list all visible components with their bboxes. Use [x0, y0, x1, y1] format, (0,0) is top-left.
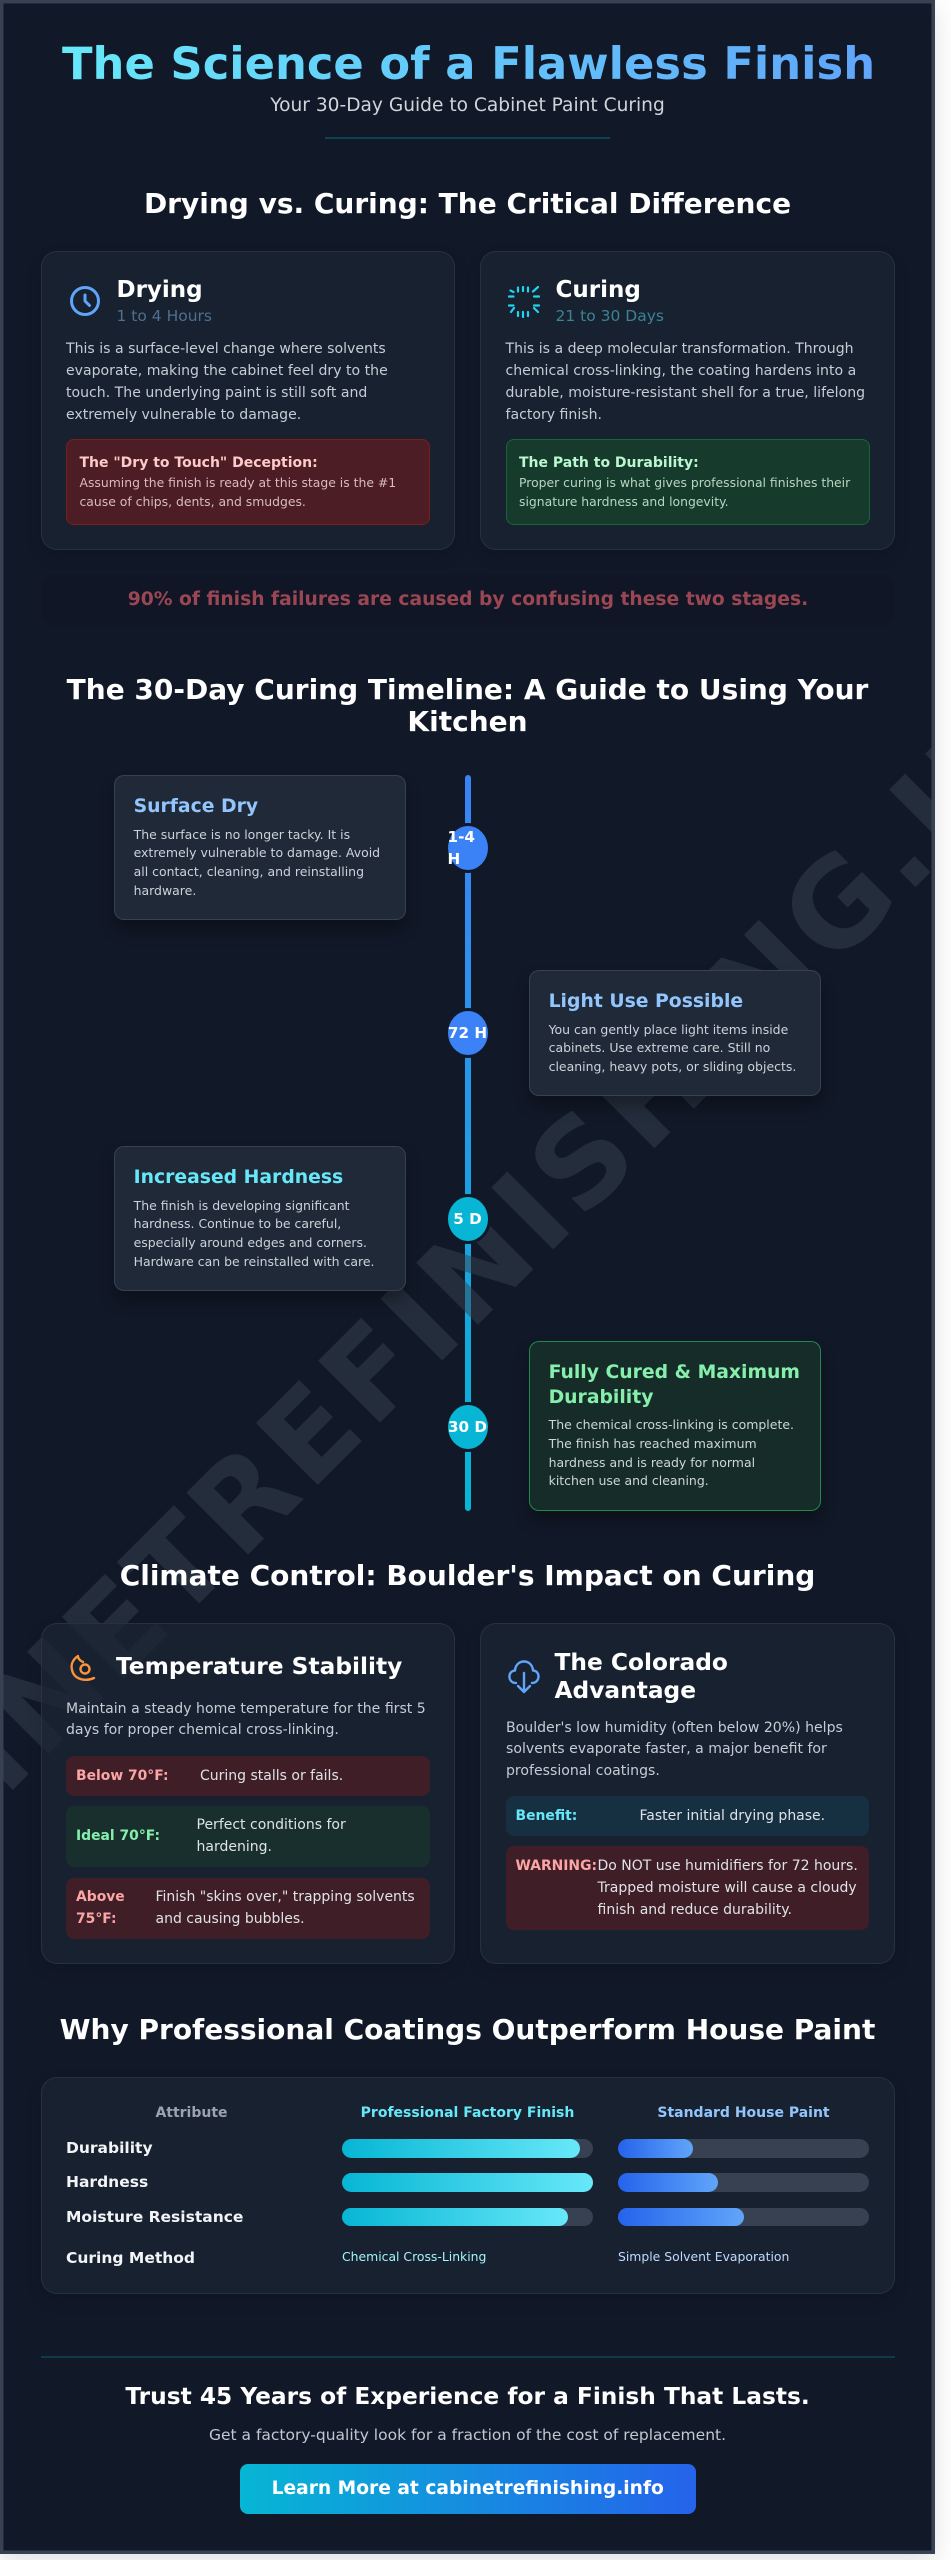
curing description: This is a deep molecular transformation. Through: [506, 341, 854, 357]
card text: especially around edges and corners.: [134, 1235, 367, 1250]
callout: durability: [506, 439, 870, 525]
value: finish and reduce durability.: [598, 1902, 792, 1918]
bar: professional durability: [342, 2139, 593, 2158]
curing duration: 21 to 30 Days: [556, 307, 664, 325]
temperature text: days for proper chemical cross-linking.: [66, 1722, 339, 1738]
curing description: durable, moisture-resistant shell for a true, lifelong: [506, 385, 865, 401]
card text: hardware.: [134, 883, 196, 898]
card text: You can gently place light items inside: [549, 1022, 788, 1036]
heading: drying vs curing: Drying vs. Curing: The Critical Difference: [144, 187, 791, 220]
drying title: Drying: [116, 277, 203, 303]
card title: Light Use Possible: [549, 991, 743, 1012]
card text: cabinets. Use extreme care. Still no: [549, 1040, 770, 1055]
curing description: factory finish.: [506, 407, 602, 423]
timeline line: [464, 775, 470, 1511]
card text: Hardware can be reinstalled with care.: [134, 1254, 374, 1269]
value: [156, 1889, 415, 1927]
value: hardening.: [196, 1839, 272, 1855]
temperature text: Maintain a steady home temperature for the first 5: [66, 1700, 426, 1716]
marker: 1-4 H: H: [448, 850, 460, 868]
marker: 1-4 H: 1-4: [448, 828, 475, 846]
card text: extremely vulnerable to damage. Avoid: [134, 845, 380, 860]
card text: [548, 1417, 794, 1488]
drying description: evaporate, making the cabinet feel dry to the: [66, 363, 388, 379]
colorado title: [554, 1648, 728, 1704]
header: [62, 37, 875, 139]
row label: durability: Durability: [66, 2139, 153, 2157]
row: ideal 70: [66, 1806, 430, 1867]
value: Curing stalls or fails.: [200, 1768, 343, 1784]
colorado title: The Colorado: [554, 1648, 728, 1676]
drying description: touch. The underlying paint is still soft and: [66, 385, 367, 401]
method: house paint: Simple Solvent Evaporation: [618, 2249, 789, 2264]
column header: professional: Professional Factory Finish: [361, 2105, 574, 2121]
value: Trapped moisture will cause a cloudy: [598, 1880, 857, 1896]
value: [597, 1858, 858, 1918]
value: and causing bubbles.: [156, 1911, 305, 1927]
callout text: Proper curing is what gives professional finishes their: [519, 475, 850, 490]
value: Do NOT use humidifiers for 72 hours.: [598, 1858, 858, 1874]
heading: timeline: Kitchen: [407, 704, 528, 738]
colorado text: Boulder's low humidity (often below 20%) helps: [506, 1720, 843, 1736]
value: [196, 1817, 346, 1855]
bar: professional moisture: [342, 2208, 593, 2226]
card: fully cured: [529, 1341, 821, 1511]
card text: hardness. Continue to be careful,: [134, 1216, 341, 1231]
callout text: signature hardness and longevity.: [519, 494, 729, 509]
column header: house paint: Standard House Paint: [657, 2105, 830, 2121]
marker: 5 D: [448, 1197, 488, 1241]
cta: [125, 2383, 810, 2514]
heading: timeline: The 30-Day Curing Timeline: A Guide to Using Your: [67, 673, 868, 706]
marker: 72 H: 72 H: [448, 1024, 487, 1042]
label: Ideal 70°F:: [76, 1828, 160, 1844]
curing description: chemical cross-linking, the coating hardens into a: [506, 363, 856, 379]
label: [76, 1889, 125, 1927]
temperature title: Temperature Stability: [116, 1653, 402, 1680]
card text: [134, 1198, 374, 1269]
card text: The finish is developing significant: [134, 1198, 350, 1212]
heading: climate: Climate Control: Boulder's Impact on Curing: [120, 1559, 815, 1592]
panel: drying: [41, 251, 455, 550]
marker: 72 H: [448, 1011, 488, 1055]
stat text: 90% of finish failures are caused by confusing these two stages.: [128, 589, 808, 610]
row label: curing method: Curing Method: [66, 2248, 195, 2266]
drying description: extremely vulnerable to damage.: [66, 407, 301, 423]
marker: 30 D: [448, 1404, 488, 1448]
card title: Surface Dry: [134, 796, 258, 817]
column header: attribute: Attribute: [155, 2105, 228, 2121]
row: benefit: [506, 1796, 869, 1836]
card title: Durability: [549, 1387, 653, 1408]
marker: 1-4 H: [448, 826, 488, 870]
panel: temperature: [41, 1623, 455, 1964]
subtitle: Your 30-Day Guide to Cabinet Paint Curing: [270, 95, 665, 116]
value: Finish "skins over," trapping solvents: [156, 1889, 415, 1905]
callout title: The "Dry to Touch" Deception:: [80, 455, 318, 471]
drying duration: 1 to 4 Hours: [116, 307, 212, 325]
row: above 75: [66, 1878, 430, 1939]
icon: clock: [70, 286, 100, 316]
bar: house moisture: [618, 2208, 869, 2226]
drying description: This is a surface-level change where solvents: [66, 341, 386, 357]
value: Faster initial drying phase.: [640, 1808, 825, 1824]
cta subtext: Get a factory-quality look for a fraction of the cost of replacement.: [209, 2426, 726, 2444]
cta heading: Trust 45 Years of Experience for a Finish That Lasts.: [125, 2383, 810, 2410]
card: light use: [529, 970, 821, 1096]
icon: curing spinner: [508, 286, 540, 318]
card text: all contact, cleaning, and reinstalling: [134, 864, 364, 879]
card text: hardness and is ready for normal: [549, 1454, 755, 1470]
curing description: [505, 341, 865, 423]
value: Perfect conditions for: [196, 1817, 346, 1833]
marker: 30 D: 30 D: [448, 1418, 487, 1436]
method: professional: Chemical Cross-Linking: [342, 2249, 486, 2264]
stat banner: [41, 575, 895, 625]
callout text: cause of chips, dents, and smudges.: [80, 494, 306, 509]
card text: cleaning, heavy pots, or sliding objects.: [549, 1059, 796, 1074]
marker: 5 D: 5 D: [453, 1210, 482, 1228]
heading: timeline: [66, 673, 868, 738]
card title: Fully Cured & Maximum: [549, 1362, 800, 1383]
callout text: [519, 475, 850, 509]
bar: house durability: [618, 2139, 869, 2158]
colorado text: [506, 1720, 843, 1779]
card title: Increased Hardness: [134, 1167, 343, 1188]
label: Above: [76, 1889, 125, 1905]
cta button: Learn More at cabinetrefinishing.info: [272, 2478, 664, 2499]
colorado text: professional coatings.: [506, 1763, 660, 1779]
card text: The surface is no longer tacky. It is: [134, 826, 350, 842]
card text: kitchen use and cleaning.: [549, 1473, 709, 1488]
row label: moisture resistance: Moisture Resistance: [66, 2208, 243, 2226]
footer divider: [41, 2356, 895, 2358]
row: warning: [506, 1846, 869, 1930]
label: WARNING:: [516, 1858, 597, 1874]
curing title: Curing: [556, 277, 641, 303]
callout text: Assuming the finish is ready at this stage is the #1: [80, 475, 396, 490]
drying description: [66, 341, 388, 423]
card: surface dry: [114, 775, 406, 920]
card text: [134, 826, 380, 898]
icon: cloud download: [508, 1660, 540, 1694]
bar: professional hardness: [342, 2173, 593, 2192]
icon: flame: [70, 1654, 96, 1681]
bar: house hardness: [618, 2173, 869, 2192]
cta button: [240, 2464, 696, 2514]
card text: The finish has reached maximum: [549, 1436, 757, 1451]
card text: The chemical cross-linking is complete.: [549, 1417, 794, 1432]
callout: deception: [66, 439, 430, 525]
panel: curing: [480, 251, 895, 550]
colorado text: solvents evaporate faster, a major benefit for: [506, 1741, 827, 1757]
heading: comparison: Why Professional Coatings Outperform House Paint: [60, 2013, 875, 2046]
callout text: [80, 475, 396, 509]
label: Below 70°F:: [76, 1768, 169, 1784]
card: increased hardness: [114, 1146, 406, 1291]
card title: [549, 1362, 800, 1408]
label: 75°F:: [76, 1911, 117, 1927]
callout title: The Path to Durability:: [519, 455, 699, 471]
panel: comparison chart: [41, 2077, 895, 2294]
colorado title: Advantage: [554, 1676, 696, 1704]
header divider: [325, 136, 610, 138]
card text: [548, 1022, 796, 1074]
row label: hardness: Hardness: [66, 2173, 148, 2191]
label: Benefit:: [516, 1808, 577, 1824]
title: The Science of a Flawless Finish: [62, 37, 875, 90]
temperature text: [66, 1700, 426, 1738]
panel: colorado: [480, 1623, 895, 1964]
row: below 70: [66, 1756, 430, 1796]
